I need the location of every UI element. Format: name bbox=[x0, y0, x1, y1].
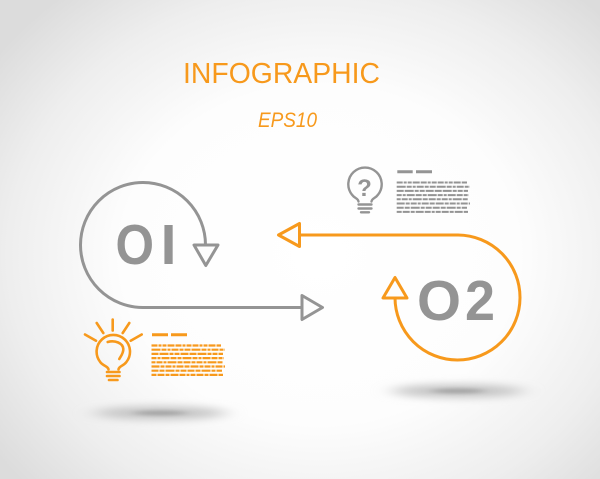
floor shadow: left bbox=[94, 406, 226, 420]
step 1 number: O bbox=[116, 213, 154, 277]
rays bbox=[85, 320, 142, 341]
arrowhead: up bbox=[383, 278, 407, 298]
base bbox=[358, 204, 372, 212]
text placeholder: gray bbox=[397, 182, 470, 212]
icon: gray question bulb bbox=[348, 168, 382, 212]
step 1 number: I bbox=[161, 213, 176, 277]
step 1: gray looping arrow bbox=[81, 182, 323, 320]
step 2 number: 2 bbox=[465, 269, 495, 333]
step 2 number bbox=[417, 269, 495, 333]
arrowhead: right bbox=[302, 296, 322, 320]
subtitle: EPS10 bbox=[258, 109, 317, 132]
curved arrow line bbox=[81, 182, 302, 308]
text placeholder: orange bbox=[152, 346, 225, 375]
highlight bbox=[108, 341, 123, 359]
title: INFOGRAPHIC bbox=[183, 58, 380, 90]
arrowhead: left bbox=[278, 224, 300, 246]
bulb outline bbox=[97, 335, 130, 370]
question mark: ? bbox=[357, 175, 372, 202]
step 2 number: O bbox=[417, 269, 461, 333]
icon: orange light bulb bbox=[85, 320, 142, 380]
heading placeholder: gray bbox=[397, 170, 432, 173]
heading placeholder: orange bbox=[152, 333, 187, 336]
floor shadow: right bbox=[392, 384, 524, 398]
arrowhead: down bbox=[194, 245, 218, 266]
bulb outline bbox=[348, 168, 382, 202]
step 2: orange looping arrow bbox=[278, 224, 520, 360]
base bbox=[107, 372, 120, 380]
curved arrow line bbox=[299, 235, 520, 360]
